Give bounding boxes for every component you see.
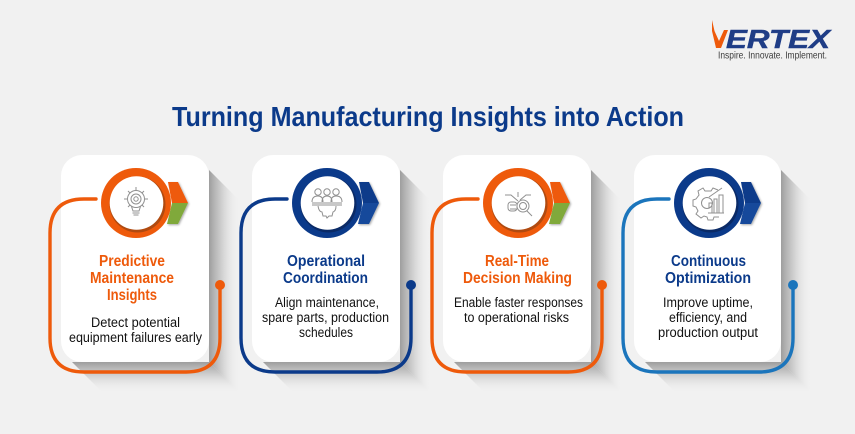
card <box>634 155 781 362</box>
ring <box>101 168 171 238</box>
connector dot <box>597 280 607 290</box>
card shadow <box>72 170 240 393</box>
heading: Maintenance <box>90 270 174 287</box>
description: equipment failures early <box>69 330 202 345</box>
logo tagline: Inspire. Innovate. Implement. <box>718 50 827 62</box>
panel: predictive maintenance <box>50 155 240 393</box>
logo <box>712 20 832 62</box>
description: Align maintenance, <box>275 295 379 310</box>
card shadow <box>263 170 431 393</box>
description <box>69 315 202 345</box>
description: schedules <box>299 325 353 340</box>
card <box>252 155 400 362</box>
logo mark: V <box>712 20 728 48</box>
chevron arrow <box>549 182 570 224</box>
description: spare parts, production <box>262 310 389 325</box>
heading: Operational <box>287 253 365 270</box>
description: to operational risks <box>464 310 569 325</box>
description <box>262 295 389 340</box>
connector line <box>432 199 602 372</box>
chevron arrow <box>740 182 761 224</box>
connector line <box>623 199 793 372</box>
chevron arrow <box>167 182 188 224</box>
connector dot <box>406 280 416 290</box>
icon: light bulb target <box>124 187 148 215</box>
description: production output <box>658 325 758 340</box>
connector line <box>50 199 220 372</box>
description <box>454 295 583 325</box>
card shadow <box>645 170 812 393</box>
ring <box>292 168 362 238</box>
ring <box>674 168 744 238</box>
card shadow <box>454 170 622 393</box>
heading <box>665 253 751 287</box>
heading: Optimization <box>665 270 751 287</box>
connector line <box>241 199 411 372</box>
title: Turning Manufacturing Insights into Action <box>172 101 684 132</box>
card <box>61 155 209 362</box>
logo wordmark: ERTEX <box>726 24 832 54</box>
heading: Continuous <box>671 253 746 270</box>
heading <box>283 253 368 287</box>
chevron arrow <box>358 182 379 224</box>
description: Improve uptime, <box>663 295 753 310</box>
heading <box>90 253 174 304</box>
heading <box>463 253 572 287</box>
description: efficiency, and <box>669 310 747 325</box>
icon: team around gear <box>312 189 342 218</box>
panel: real-time decision making <box>432 155 622 393</box>
heading: Decision Making <box>463 270 572 287</box>
panel: continuous optimization <box>623 155 812 393</box>
heading: Insights <box>107 287 157 304</box>
heading: Predictive <box>99 253 165 270</box>
description: Enable faster responses <box>454 295 583 310</box>
icon: magnifier with network <box>505 192 532 216</box>
ring <box>483 168 553 238</box>
card <box>443 155 591 362</box>
description: Detect potential <box>91 315 180 330</box>
heading: Coordination <box>283 270 368 287</box>
panel: operational coordination <box>241 155 431 393</box>
connector dot <box>215 280 225 290</box>
icon: gear with bar chart <box>693 188 724 220</box>
description <box>658 295 758 340</box>
heading: Real-Time <box>485 253 549 270</box>
connector dot <box>788 280 798 290</box>
